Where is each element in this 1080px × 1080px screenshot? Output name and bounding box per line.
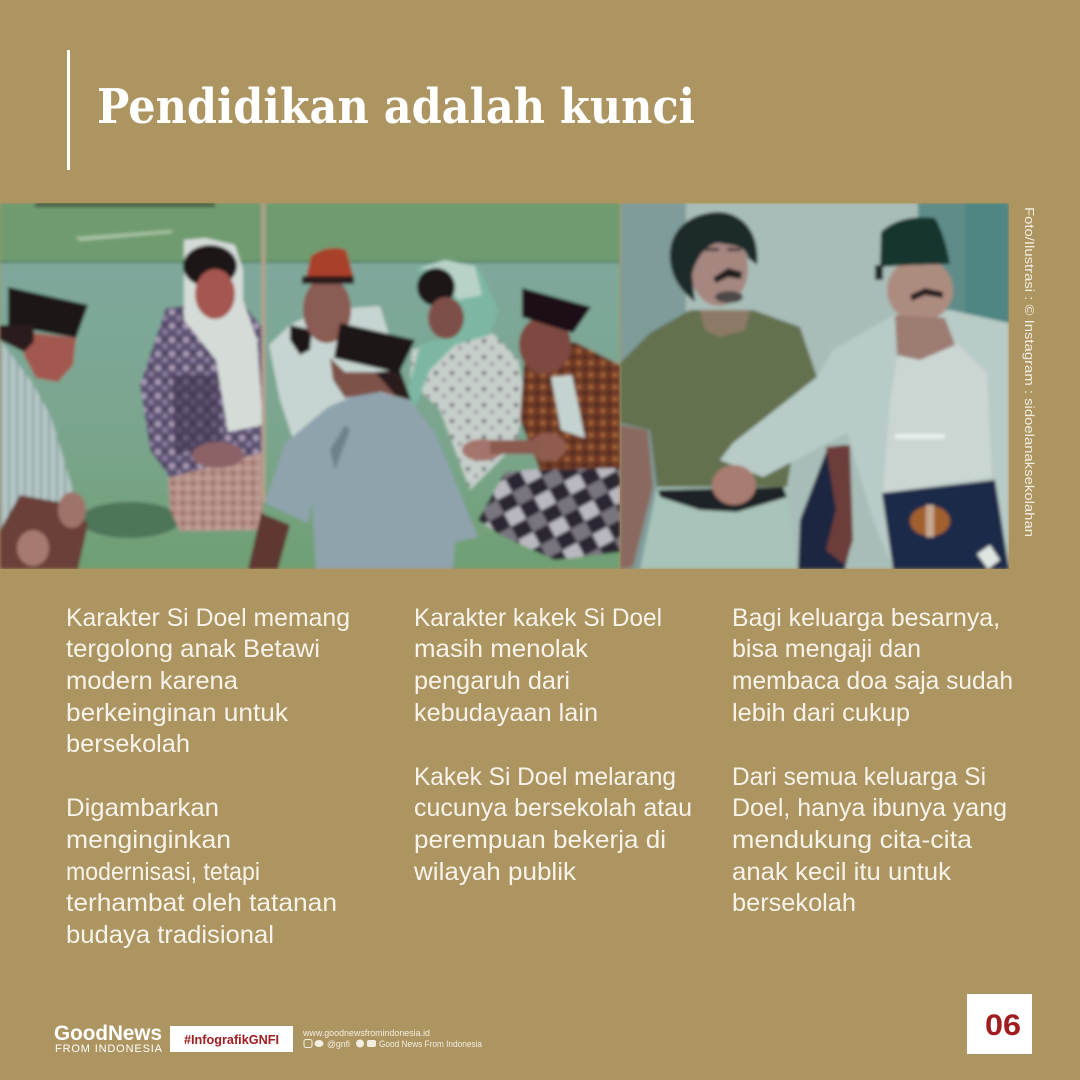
logo: GoodNews From Indonesia xyxy=(54,1022,163,1055)
title: Pendidikan adalah kunci xyxy=(97,79,695,135)
text column 1: terhambat oleh tatanan xyxy=(66,889,337,917)
text column 3: bisa mengaji dan xyxy=(732,635,921,663)
photo: two men walking xyxy=(620,203,1009,569)
text column 3: Dari semua keluarga Si xyxy=(732,763,986,791)
text column 1: Digambarkan xyxy=(66,794,219,822)
woman in purple dress xyxy=(140,238,264,531)
logo: GoodNews From Indonesia: FROM INDONESIA xyxy=(55,1043,163,1055)
title xyxy=(67,50,695,170)
text column 3: Bagi keluarga besarnya, xyxy=(732,604,1000,632)
man in white jacket xyxy=(712,217,1009,569)
text column 1: berkeinginan untuk xyxy=(66,699,289,727)
hashtag badge xyxy=(170,1026,293,1052)
man seated left xyxy=(0,287,88,569)
text column 2: kebudayaan lain xyxy=(414,699,598,727)
text column 3: anak kecil itu untuk xyxy=(732,858,952,886)
text column 2 xyxy=(413,604,692,886)
text column 3: lebih dari cukup xyxy=(732,699,910,727)
text column 2: masih menolak xyxy=(414,635,589,663)
logo: GoodNews From Indonesia: GoodNews xyxy=(54,1022,162,1045)
text column 2: wilayah publik xyxy=(413,858,577,886)
text column 2: Karakter kakek Si Doel xyxy=(414,604,662,632)
hashtag badge: #InfografikGNFI xyxy=(184,1032,279,1047)
text column 3: Doel, hanya ibunya yang xyxy=(732,794,1007,822)
text column 1: tergolong anak Betawi xyxy=(66,635,320,663)
text column 1: modernisasi, tetapi xyxy=(66,858,260,886)
text column 1: Karakter Si Doel memang xyxy=(66,604,350,632)
man with black cap and batik shirt xyxy=(462,288,620,560)
text column 2: Kakek Si Doel melarang xyxy=(414,763,676,791)
website and social handles: Good News From Indonesia xyxy=(379,1039,482,1049)
icon: twitter xyxy=(314,1040,324,1047)
man in grey shirt seen from behind xyxy=(248,323,478,569)
text column 3: membaca doa saja sudah xyxy=(732,667,1013,695)
website and social handles xyxy=(302,1028,482,1049)
text column 3 xyxy=(732,604,1013,917)
pole xyxy=(262,203,266,503)
text column 2: pengaruh dari xyxy=(414,667,570,695)
icon: youtube xyxy=(367,1040,376,1047)
text column 1: menginginkan xyxy=(66,826,231,854)
text column 1 xyxy=(66,604,350,949)
text column 1: budaya tradisional xyxy=(66,921,274,949)
photo: family seated on the grass xyxy=(0,203,620,569)
website and social handles: @gnfi xyxy=(327,1039,350,1049)
photo credit: Foto/Ilustrasi : © Instagram : sidoelanaksekolahan xyxy=(1022,207,1037,537)
text column 1: bersekolah xyxy=(66,730,190,758)
page number: 06 xyxy=(985,1009,1021,1042)
page number xyxy=(967,994,1032,1054)
icon: instagram xyxy=(304,1040,312,1048)
icon: facebook xyxy=(356,1040,364,1048)
text column 1: modern karena xyxy=(66,667,238,695)
woman with green headscarf xyxy=(405,260,526,490)
man with red fez xyxy=(269,248,392,445)
man in green t-shirt xyxy=(620,212,853,569)
text column 3: mendukung cita-cita xyxy=(732,826,972,854)
website and social handles: www.goodnewsfromindonesia.id xyxy=(302,1028,430,1038)
text column 2: cucunya bersekolah atau xyxy=(414,794,692,822)
text column 3: bersekolah xyxy=(732,889,856,917)
text column 2: perempuan bekerja di xyxy=(414,826,666,854)
